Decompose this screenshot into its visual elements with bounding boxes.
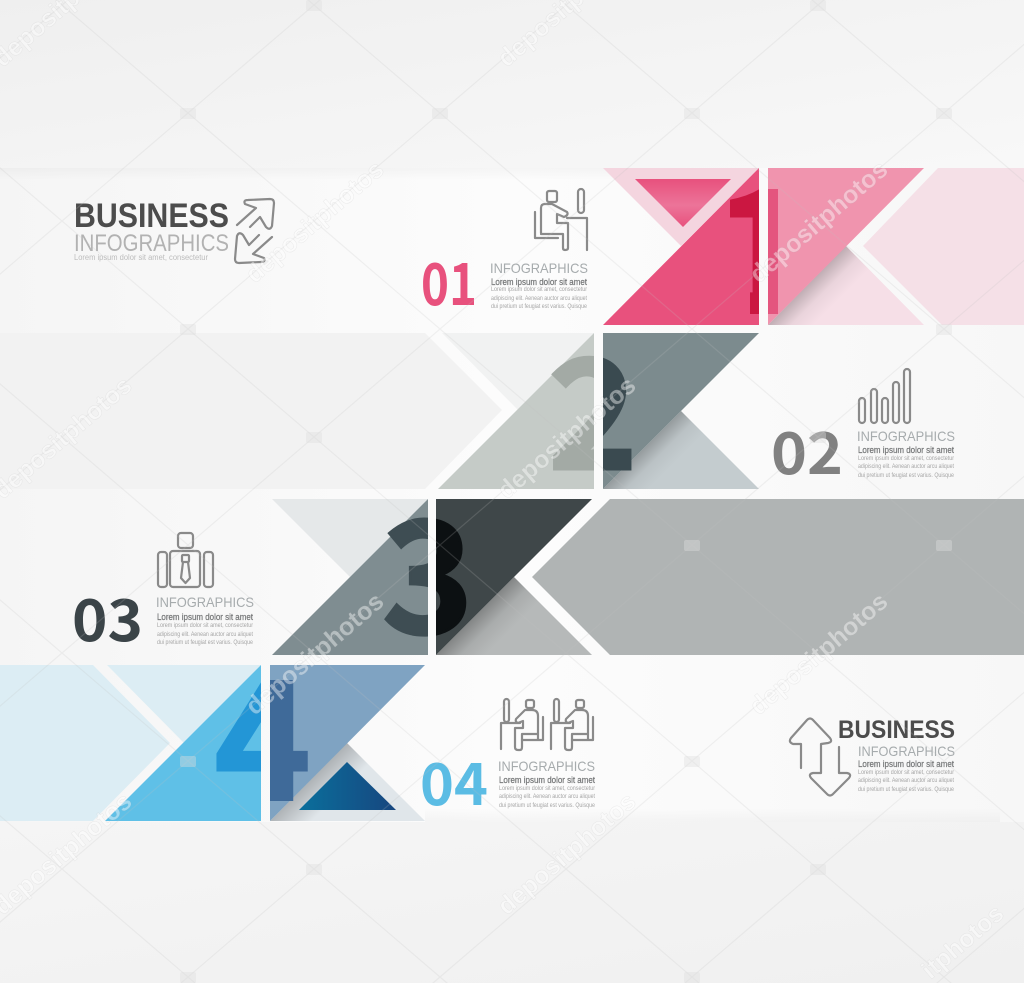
dark right band [532, 499, 1024, 655]
dark lower fold triangle [436, 577, 592, 655]
grey main triangle [438, 333, 594, 489]
grey left band [0, 333, 502, 489]
numeral 3: 3 [382, 453, 473, 678]
text block: step 02 [857, 428, 955, 479]
text block: step 03: Lorem ipsum dolor sit amet, consectetur [157, 623, 253, 629]
pink light top triangle [603, 168, 759, 246]
text block: step 01 [490, 260, 588, 310]
text block: step 04: dui pretium ut feugiat est varius. Quisque [499, 803, 596, 809]
blue inner triangle [299, 762, 396, 810]
text block: step 04: INFOGRAPHICS [498, 758, 595, 774]
text block: step 03: adipiscing elit. Aenean auctor arcu aliquet [157, 632, 253, 638]
watermark overlay: depositphotos [492, 371, 641, 505]
numeral 2: 2 [548, 293, 638, 513]
numeral 3 [384, 518, 466, 637]
pink main triangle [603, 168, 759, 325]
watermark overlay: depositphotos [492, 787, 641, 921]
pink inner triangle [635, 179, 731, 227]
heading: business infographics bottom [838, 716, 955, 793]
icon: two people at desks [501, 699, 593, 750]
steel blue upper right triangle [270, 665, 425, 821]
panel: step 3 dark [272, 499, 1024, 655]
numeral 1: 1 [712, 114, 813, 364]
text block: step 03: INFOGRAPHICS [156, 594, 254, 610]
pink upper right triangle [768, 168, 924, 325]
heading: business infographics bottom: Lorem ipsum dolor sit amet [858, 759, 955, 769]
step 04 number: 04 [420, 738, 488, 822]
heading: business infographics top: INFOGRAPHICS [74, 230, 229, 257]
blue fold shadow [270, 743, 425, 821]
text block: step 02: Lorem ipsum dolor sit amet, consectetur [858, 456, 954, 462]
pink fold shadow [768, 246, 924, 325]
charcoal upper right triangle [436, 499, 592, 655]
heading: business infographics top: BUSINESS [74, 197, 229, 235]
text block: step 01: Lorem ipsum dolor sit amet [491, 277, 588, 287]
numeral 2: 2 [548, 293, 638, 513]
pink lower fold triangle [768, 246, 924, 325]
icon: bar chart [859, 369, 910, 423]
step 01 number: 01 [421, 238, 477, 322]
numeral 3: 3 [382, 453, 473, 678]
text block: step 01: dui pretium ut feugiat est varius. Quisque [491, 304, 588, 310]
watermark overlay: depositphotos [744, 155, 893, 289]
grey fold shadow [603, 411, 759, 489]
text block: step 01: adipiscing elit. Aenean auctor arcu aliquet [491, 296, 587, 302]
heading: business infographics bottom: BUSINESS [838, 716, 955, 744]
heading: business infographics bottom: adipiscing elit. Aenean auctor arcu aliquet [858, 778, 954, 784]
watermark overlay: depositphotos [240, 587, 389, 721]
text block: step 02: Lorem ipsum dolor sit amet [858, 445, 955, 455]
watermark overlay: depositphotos [744, 587, 893, 721]
text block: step 01: INFOGRAPHICS [490, 260, 588, 276]
numeral 1: 1 [712, 114, 813, 364]
grey lower fold triangle [603, 411, 759, 489]
numeral 4 [216, 680, 308, 801]
step 03 number: 03 [72, 574, 143, 658]
panel: step 1 pink [603, 168, 1024, 325]
text block: step 03 [156, 594, 254, 646]
text block: step 02: INFOGRAPHICS [857, 428, 955, 444]
numeral 4: 4 [214, 609, 311, 848]
watermark overlay: depositphotos [240, 155, 389, 289]
numeral 2 [551, 356, 632, 470]
heading: business infographics top [74, 197, 229, 262]
text block: step 01: Lorem ipsum dolor sit amet, consectetur [491, 287, 587, 293]
text block: step 02: dui pretium ut feugiat est varius. Quisque [858, 473, 955, 479]
dark main triangle [272, 499, 428, 655]
panel: step 2 grey [368, 333, 759, 489]
dark fold shadow [436, 577, 592, 655]
heading: business infographics bottom: INFOGRAPHICS [858, 743, 955, 759]
grey light top triangle [442, 333, 594, 410]
text block: step 04: Lorem ipsum dolor sit amet, consectetur [499, 786, 595, 792]
heading: business infographics top: Lorem ipsum dolor sit amet, consectetur [74, 253, 208, 262]
blue main triangle [105, 665, 261, 821]
text block: step 02: adipiscing elit. Aenean auctor arcu aliquet [858, 464, 954, 470]
icon: up and down arrows [790, 718, 850, 796]
watermark overlay: itphotos [916, 899, 1009, 983]
text block: step 04: Lorem ipsum dolor sit amet [499, 775, 596, 785]
panel: step 4 blue [0, 665, 425, 821]
icon: diagonal arrows [235, 199, 274, 263]
numeral 4: 4 [214, 609, 311, 848]
icon: person at desk [535, 189, 587, 250]
numeral 1 [730, 189, 778, 314]
text block: step 04: adipiscing elit. Aenean auctor arcu aliquet [499, 794, 595, 800]
heading: business infographics bottom: dui pretium ut feugiat est varius. Quisque [858, 787, 955, 793]
text block: step 03: Lorem ipsum dolor sit amet [157, 612, 254, 622]
blue left band [0, 665, 170, 821]
blue light top triangle [107, 665, 261, 743]
step 02 number: 02 [771, 407, 843, 491]
heading: business infographics bottom: Lorem ipsum dolor sit amet, consectetur [858, 770, 954, 776]
text block: step 03: dui pretium ut feugiat est varius. Quisque [157, 640, 254, 646]
icon: businessman with tie [158, 533, 213, 587]
dark light top triangle [272, 499, 428, 577]
blue lower fold triangle [270, 743, 425, 821]
text block: step 04 [498, 758, 596, 809]
slate upper right triangle [603, 333, 759, 489]
pink right band [863, 168, 1024, 325]
